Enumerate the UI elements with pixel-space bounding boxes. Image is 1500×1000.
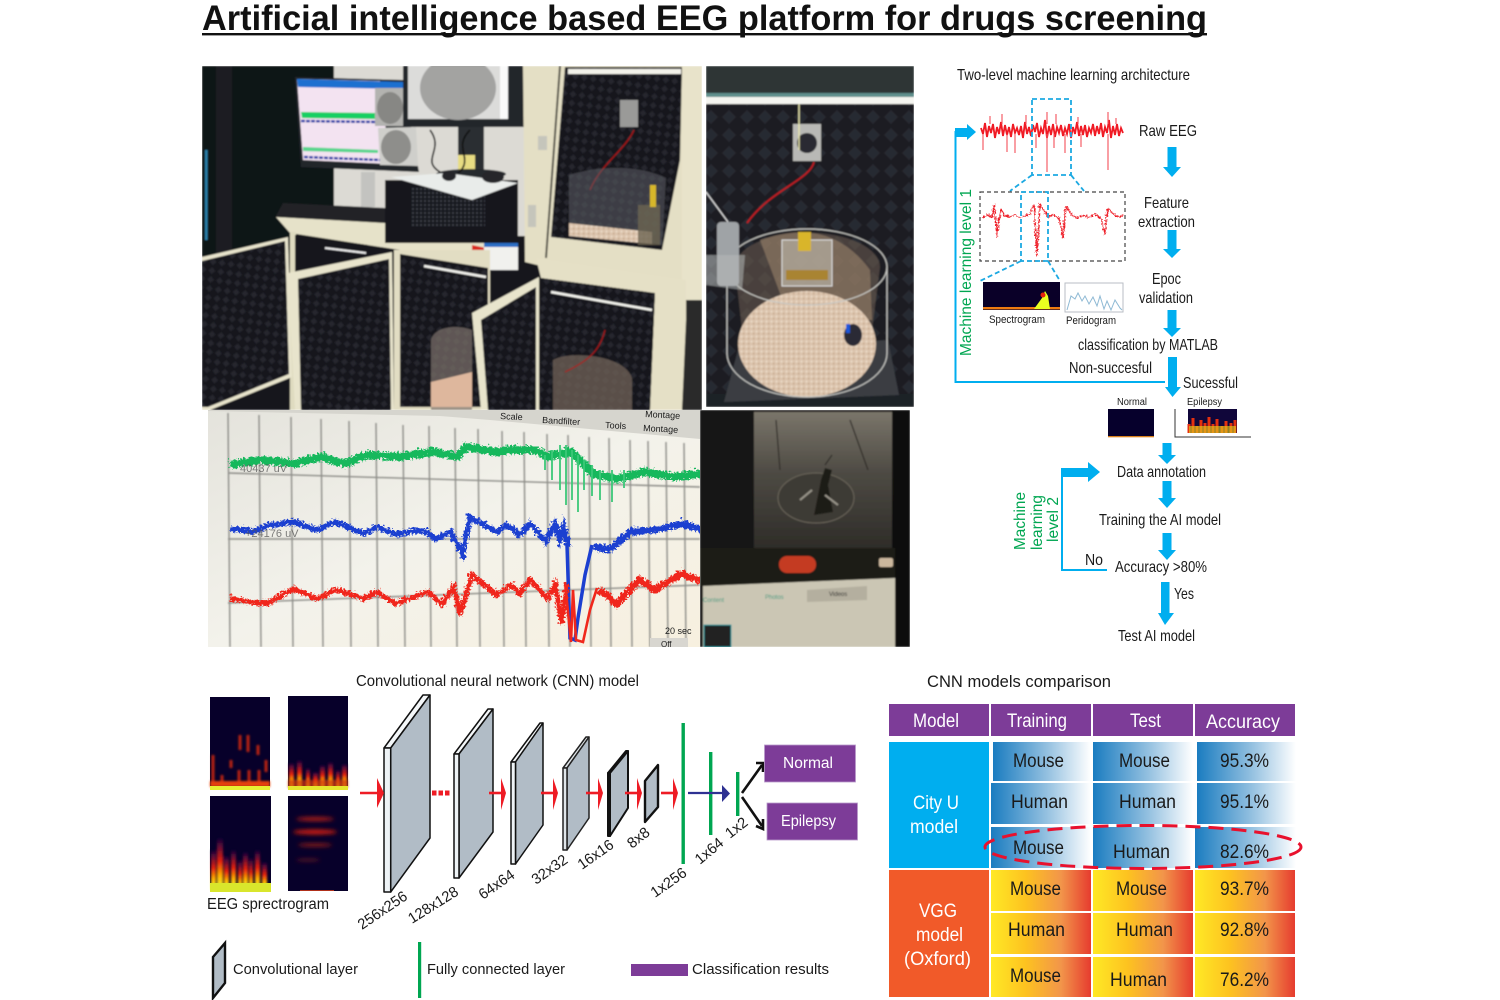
legend: classification results: Classification results xyxy=(692,961,829,978)
layer size labels xyxy=(355,814,751,933)
normal result thumbnail xyxy=(1108,397,1154,437)
arrow: layer 6 to fully connected xyxy=(661,778,678,810)
row group: City U model xyxy=(889,742,989,868)
left open door xyxy=(202,237,292,410)
label: machine learning level 2: learning xyxy=(1029,495,1046,550)
fully connected layer 1x2 xyxy=(736,772,739,816)
row: City U mouse mouse xyxy=(993,742,1296,781)
upper cabinet xyxy=(523,66,702,410)
lower right compartment xyxy=(532,258,686,410)
photo: EEG trace screen xyxy=(208,409,700,650)
step label: no: No xyxy=(1085,552,1103,569)
step label: feature extraction: extraction xyxy=(1138,214,1195,231)
screen footer: 20 sec xyxy=(665,626,692,636)
fully connected layer 1x64 xyxy=(709,752,712,835)
infographic canvas xyxy=(202,4,1302,1000)
row: VGG human human: 92.8% xyxy=(1220,920,1269,941)
icon: computer monitor with EEG traces xyxy=(295,77,419,172)
legend: convolutional layer: Convolutional layer xyxy=(233,961,358,978)
step label: accuracy threshold: Accuracy >80% xyxy=(1115,559,1207,576)
toolbar text: Montage xyxy=(643,423,678,435)
spectrogram caption: EEG sprectrogram xyxy=(207,896,329,913)
layer size labels: 64x64 xyxy=(476,866,518,903)
left compartment xyxy=(295,235,368,275)
conv layer 64x64 xyxy=(511,723,543,864)
row: VGG mouse human: 76.2% xyxy=(1220,970,1269,991)
arrow: layer 5 to 6 xyxy=(625,778,642,810)
chart: blue EEG trace: +24176 uV xyxy=(245,528,299,540)
conv layer 256x256 xyxy=(384,695,430,892)
row: VGG mouse mouse: Mouse xyxy=(1010,879,1061,900)
zoom box: cyan selection on raw EEG xyxy=(1010,99,1084,191)
chart: green EEG trace: 40437 uV xyxy=(240,463,288,475)
title: Artificial intelligence based EEG platform for drugs screening xyxy=(202,0,1207,38)
class box: epilepsy: Epilepsy xyxy=(781,813,836,830)
row: City U mouse mouse: Mouse xyxy=(1119,751,1170,772)
row: City U human human xyxy=(991,783,1296,824)
row: City U mouse mouse: Mouse xyxy=(1013,751,1064,772)
arrow: feature extraction to epoch validation xyxy=(1163,230,1181,258)
layer size labels: 256x256 xyxy=(355,888,411,933)
step label: epoc validation xyxy=(1139,271,1193,307)
icon: mouse xyxy=(844,324,862,346)
chart: EEG spectrogram B xyxy=(288,696,348,790)
table header: Accuracy xyxy=(1206,712,1280,733)
row group: VGG model: model xyxy=(916,925,963,946)
arrow: epoc validation to classification xyxy=(1163,310,1181,337)
desk surface xyxy=(274,216,486,251)
icon: speaker device on wall xyxy=(706,104,821,223)
chart: EEG spectrogram C xyxy=(210,796,271,892)
legend: fully connected layer: Fully connected layer xyxy=(427,961,565,978)
arrow: layer 2 to 3 xyxy=(489,778,506,810)
chart: red EEG trace xyxy=(228,572,700,642)
toolbar text: Tools xyxy=(605,420,627,431)
table header: Test xyxy=(1130,711,1162,732)
arrow: level 2 feedback loop xyxy=(1061,462,1107,570)
step label: yes: Yes xyxy=(1174,586,1194,603)
front open door xyxy=(472,277,539,410)
label: machine learning level 2: level 2 xyxy=(1045,497,1062,542)
arrow: input to first layer xyxy=(360,778,384,808)
heading: comparison: CNN models comparison xyxy=(927,672,1111,691)
heading: CNN model: Convolutional neural network (CNN) model xyxy=(356,673,639,690)
icon: computer tower xyxy=(385,171,518,270)
panel: CNN model diagram xyxy=(207,673,858,998)
icon: arena floor and mouse xyxy=(776,420,868,523)
arrow: data annotation to training xyxy=(1158,481,1176,508)
icon: cage insert xyxy=(782,232,832,286)
chart: spectrogram thumbnail xyxy=(983,282,1060,310)
layer size labels: 1x256 xyxy=(648,864,690,901)
row: City U human human: Human xyxy=(1119,792,1176,813)
arrow: results to data annotation xyxy=(1158,443,1176,464)
step label: feature extraction: Feature xyxy=(1144,195,1189,212)
table header xyxy=(889,704,1295,736)
toolbar text: Montage xyxy=(645,409,680,421)
callout: red dashed ellipse highlight xyxy=(985,826,1301,868)
photo: mouse in arena on phone video xyxy=(700,410,910,647)
row: VGG mouse mouse: 93.7% xyxy=(1220,879,1269,900)
row: City U human human: Human xyxy=(1011,792,1068,813)
phone gallery tabs xyxy=(703,578,895,647)
chart: EEG spectrogram D xyxy=(288,796,348,891)
toolbar text xyxy=(208,409,700,439)
screen footer xyxy=(650,628,692,647)
chart: blue EEG trace xyxy=(228,515,700,640)
row: VGG mouse mouse: Mouse xyxy=(1116,879,1167,900)
row: City U human human: 95.1% xyxy=(1220,792,1269,813)
row: VGG mouse human: Human xyxy=(1110,970,1167,991)
arrow: to normal class xyxy=(742,763,763,793)
icon: water bottle xyxy=(706,222,745,290)
screen grid xyxy=(228,413,700,647)
arrow: classification to results xyxy=(1165,357,1181,397)
row: VGG mouse human xyxy=(991,957,1295,997)
layer size labels: 1x2 xyxy=(722,814,751,842)
row group: VGG model xyxy=(889,870,989,997)
class box: normal xyxy=(764,745,856,782)
arrow: to epilepsy class xyxy=(742,797,763,829)
arrow: training to accuracy xyxy=(1158,533,1176,560)
conv layer 128x128 xyxy=(454,709,493,878)
label: machine learning level 2: Machine xyxy=(1012,492,1029,550)
layer size labels: 32x32 xyxy=(529,851,571,888)
row: City U mouse human: 82.6% xyxy=(1220,842,1269,863)
toolbar text: Scale xyxy=(500,411,523,422)
row: City U mouse mouse: 95.3% xyxy=(1220,751,1269,772)
table header: Model xyxy=(913,711,959,732)
class box: normal: Normal xyxy=(783,755,833,772)
row group: VGG model: (Oxford) xyxy=(904,949,971,970)
step label: non-succesful: Non-succesful xyxy=(1069,360,1152,377)
arrow: level 1 feedback loop xyxy=(955,124,1165,382)
row: VGG human human: Human xyxy=(1116,920,1173,941)
dots: skipped layers xyxy=(432,790,450,796)
phone gallery tabs: Videos xyxy=(829,592,847,598)
layer size labels: 1x64 xyxy=(692,834,727,868)
chart: raw EEG trace xyxy=(981,112,1123,172)
step label: data annotation: Data annotation xyxy=(1117,464,1206,481)
row: VGG mouse mouse xyxy=(991,870,1295,911)
arrow: layer 3 to 4 xyxy=(541,778,558,810)
toolbar text: Bandfilter xyxy=(542,415,580,427)
fully connected layer 1x256 xyxy=(682,723,685,864)
glass arena cylinder with bedding xyxy=(724,229,899,402)
phone gallery tabs: Photos xyxy=(765,595,784,601)
panel: CNN models comparison table xyxy=(889,672,1301,997)
legend: classification results xyxy=(631,961,829,978)
step label: training the AI model: Training the AI model xyxy=(1099,512,1221,529)
icon: keyboard xyxy=(276,203,385,226)
spectrogram label: Spectrogram xyxy=(989,314,1045,326)
heading: architecture: Two-level machine learning architecture xyxy=(957,67,1190,84)
conv layer 8x8 xyxy=(645,765,658,822)
normal result thumbnail: Normal xyxy=(1117,397,1147,408)
periodogram label: Peridogram xyxy=(1066,315,1116,327)
step label: test AI model: Test AI model xyxy=(1118,628,1195,645)
row: City U mouse human xyxy=(991,827,1296,868)
step label: raw EEG: Raw EEG xyxy=(1139,123,1197,140)
row: VGG human human: Human xyxy=(1008,920,1065,941)
label: machine learning level 1: Machine learning level 1 xyxy=(958,189,975,356)
chart: feature EEG trace xyxy=(981,203,1123,256)
zoom box: feature extraction window xyxy=(980,192,1125,261)
epilepsy result thumbnail: Epilepsy xyxy=(1187,397,1222,408)
screen footer: Off xyxy=(661,640,672,649)
photo: EEG recording workstation and cabinets xyxy=(202,56,702,410)
row group: City U model: City U xyxy=(913,793,959,814)
legend: convolutional layer xyxy=(213,943,358,998)
step label: feature extraction xyxy=(1138,195,1195,231)
photo: recording arena with mouse xyxy=(706,66,914,407)
layer size labels: 8x8 xyxy=(624,824,653,852)
phone gallery tabs: Content xyxy=(703,598,724,604)
table header: Training xyxy=(1007,711,1067,732)
row: City U mouse human: Human xyxy=(1113,842,1170,863)
conv layer 32x32 xyxy=(563,737,589,850)
conv layer 16x16 xyxy=(608,751,628,836)
chart: EEG spectrogram A xyxy=(210,697,270,790)
chart: periodogram thumbnail xyxy=(1065,283,1123,312)
step label: classification by MATLAB: classification by MATLAB xyxy=(1078,337,1218,354)
step label: epoc validation: Epoc xyxy=(1152,271,1181,288)
row: VGG mouse human: Mouse xyxy=(1010,966,1061,987)
lower centre compartment xyxy=(394,250,490,410)
layer size labels: 128x128 xyxy=(405,883,462,927)
step label: epoc validation: validation xyxy=(1139,290,1193,307)
epilepsy result thumbnail xyxy=(1175,397,1251,437)
arrow: accuracy to test xyxy=(1158,582,1174,625)
row: City U mouse human: Mouse xyxy=(1013,838,1064,859)
icon: second monitor with arena video xyxy=(361,56,525,207)
label: machine learning level 2 xyxy=(1012,492,1062,550)
arrow: blue between fully connected layers xyxy=(688,785,730,802)
arrow: layer 4 to 5 xyxy=(586,778,603,810)
second open door xyxy=(288,252,394,410)
step label: sucessful: Sucessful xyxy=(1183,375,1238,392)
arrow: raw EEG to feature extraction xyxy=(1163,147,1181,177)
legend: fully connected layer xyxy=(418,942,565,998)
layer size labels: 16x16 xyxy=(575,836,617,873)
panel: two-level machine learning architecture xyxy=(955,67,1251,645)
row group: VGG model: VGG xyxy=(919,901,957,922)
zoom box: cyan epoch selection xyxy=(980,192,1060,281)
row: VGG human human xyxy=(991,913,1295,954)
chart: green EEG trace xyxy=(228,445,700,512)
phone control band xyxy=(718,548,896,584)
row group: City U model: model xyxy=(910,817,958,838)
class box: epilepsy xyxy=(767,803,858,840)
